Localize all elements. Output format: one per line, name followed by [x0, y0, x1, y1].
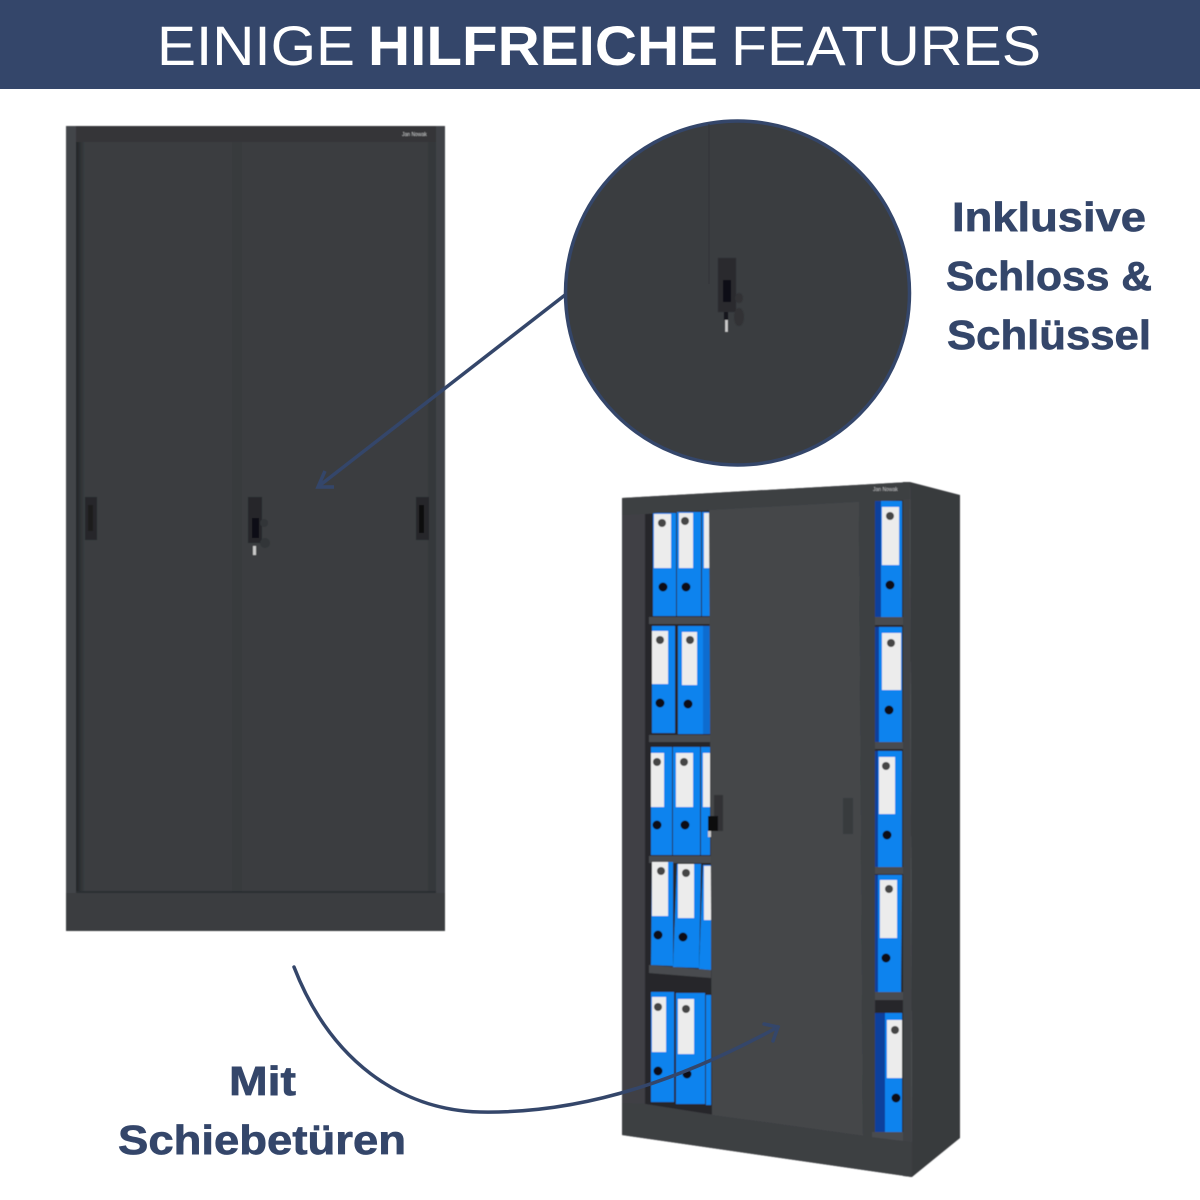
brand mark right cabinet: Jan Nowak	[873, 487, 898, 493]
curved arrow to sliding door	[294, 967, 778, 1112]
sliding door	[708, 499, 863, 1136]
arrow from circle to lock	[318, 295, 565, 487]
right shelves	[872, 617, 904, 1142]
cabinet base	[622, 1103, 912, 1177]
lock detail	[718, 258, 744, 332]
cabinet top rail	[622, 482, 910, 515]
left shelves	[649, 617, 711, 978]
binders left row 4	[651, 862, 711, 970]
binders right column	[875, 501, 902, 1132]
closed cabinet with sliding doors	[66, 126, 445, 931]
binders left row 2	[652, 626, 710, 734]
left door handle	[85, 497, 97, 540]
title: FEATURES	[731, 14, 1041, 77]
callout: sliding doors: Mit	[229, 1058, 296, 1104]
right door post	[859, 498, 875, 1139]
right frame strip	[903, 482, 912, 1177]
callout: lock and key: Schlüssel	[947, 312, 1151, 358]
callout: sliding doors	[118, 1058, 406, 1163]
binders left row 1	[653, 512, 710, 616]
center lock and key	[248, 497, 270, 555]
door handle	[843, 798, 853, 834]
right door handle	[416, 497, 429, 540]
binders left row 5	[651, 992, 711, 1105]
callout: lock and key: Inklusive	[952, 194, 1146, 240]
title: EINIGE	[157, 14, 355, 77]
door lock	[714, 795, 723, 831]
callout: sliding doors: Schiebetüren	[118, 1117, 406, 1163]
open cabinet with binders	[622, 482, 960, 1177]
title: HILFREICHE	[368, 14, 718, 77]
cabinet interior	[645, 500, 905, 1145]
callout: lock and key	[946, 194, 1152, 358]
cabinet side panel	[910, 482, 960, 1177]
binders left row 3	[651, 747, 710, 855]
callout: lock and key: Schloss &	[946, 253, 1152, 299]
cabinet front frame	[622, 482, 912, 1177]
header banner	[0, 0, 1200, 89]
zoom circle showing lock	[566, 121, 910, 465]
title	[157, 14, 1041, 77]
brand mark left cabinet: Jan Nowak	[402, 132, 427, 138]
